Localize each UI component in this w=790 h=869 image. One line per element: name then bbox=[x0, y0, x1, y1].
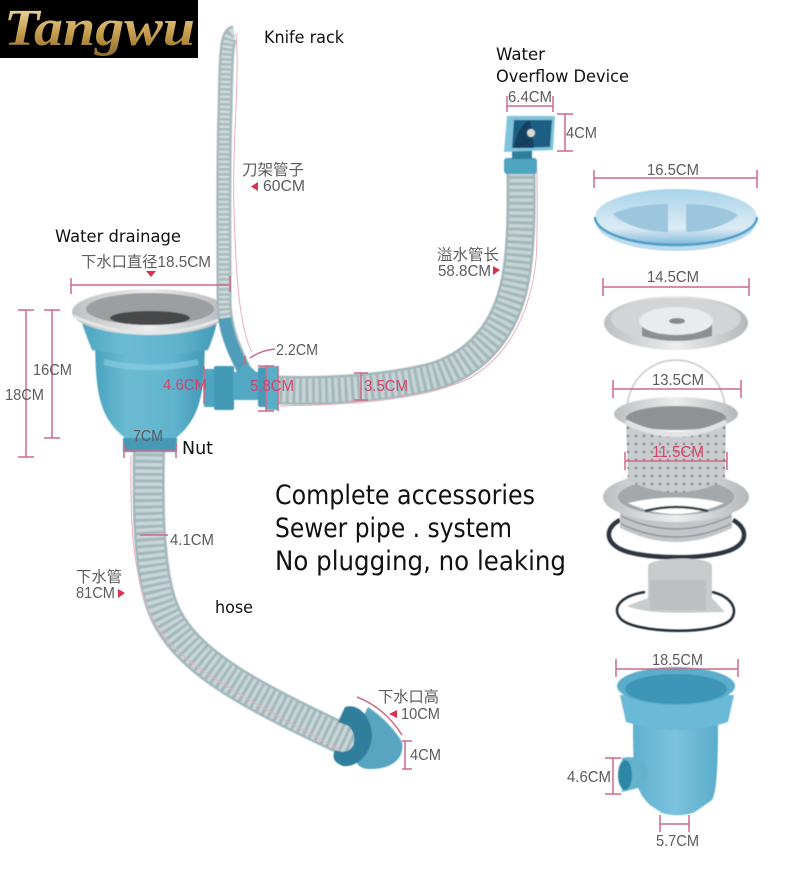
red measures: 11.5CM bbox=[652, 444, 704, 461]
chinese labels and measures: 7CM bbox=[133, 428, 163, 445]
chinese labels and measures: 58.8CM bbox=[438, 263, 491, 280]
pink guide lines bbox=[131, 33, 537, 750]
chinese labels and measures: 溢水管长 bbox=[437, 246, 499, 264]
part: stainless cover bbox=[604, 296, 748, 350]
english labels: Nut bbox=[182, 438, 213, 459]
part: thin o-ring bbox=[617, 592, 734, 631]
chinese labels and measures: 16CM bbox=[33, 362, 72, 379]
chinese labels and measures: 2.2CM bbox=[276, 342, 318, 359]
chinese labels and measures: 4.6CM bbox=[567, 769, 611, 786]
knife rack hose bbox=[224, 33, 243, 368]
red measures: 4.6CM bbox=[163, 377, 207, 394]
english labels: Water bbox=[496, 45, 545, 64]
red measures: 3.5CM bbox=[364, 378, 408, 395]
english labels: Water drainage bbox=[55, 227, 181, 246]
dimension lines bbox=[18, 96, 757, 832]
part: basket bbox=[614, 360, 738, 492]
overflow hose bbox=[276, 172, 521, 390]
main caption bbox=[275, 480, 566, 577]
chinese labels and measures: 4CM bbox=[410, 747, 441, 764]
chinese labels and measures: 下水口直径18.5CM bbox=[81, 253, 211, 271]
english labels bbox=[55, 28, 629, 617]
part: lid bbox=[595, 189, 757, 251]
red markers bbox=[118, 182, 500, 718]
red measures bbox=[163, 377, 704, 461]
chinese labels and measures: 刀架管子 bbox=[242, 161, 304, 179]
chinese labels and measures: 18CM bbox=[5, 387, 44, 404]
chinese labels and measures: 4CM bbox=[566, 125, 597, 142]
english labels: Knife rack bbox=[264, 28, 344, 47]
chinese labels and measures: 4.1CM bbox=[170, 532, 214, 549]
chinese labels and measures: 13.5CM bbox=[652, 372, 704, 389]
chinese labels and measures: 18.5CM bbox=[652, 652, 703, 669]
chinese labels and measures: 81CM bbox=[76, 585, 115, 602]
chinese labels and measures: 5.7CM bbox=[656, 833, 699, 850]
part: grey nut bbox=[627, 558, 725, 613]
main caption: No plugging, no leaking bbox=[275, 546, 566, 577]
chinese labels and measures: 下水口高 bbox=[378, 688, 439, 706]
chinese labels and measures: 下水管 bbox=[76, 568, 122, 586]
overflow device bbox=[504, 116, 555, 174]
part: black o-ring bbox=[609, 520, 744, 557]
chinese labels and measures: 6.4CM bbox=[508, 89, 552, 106]
chinese labels and measures: 16.5CM bbox=[647, 162, 699, 179]
artwork group bbox=[72, 33, 757, 815]
main drain body bbox=[72, 289, 228, 452]
chinese labels and measures: 14.5CM bbox=[647, 269, 699, 286]
hose end connector bbox=[334, 706, 402, 769]
red measures: 5.8CM bbox=[250, 378, 294, 395]
main caption: Complete accessories bbox=[275, 480, 535, 511]
part: threaded ring bbox=[603, 472, 749, 542]
english labels: hose bbox=[215, 598, 253, 617]
chinese labels and measures bbox=[5, 89, 704, 850]
english labels: Overflow Device bbox=[496, 67, 629, 86]
part: blue strainer body bbox=[617, 667, 735, 815]
chinese labels and measures: 60CM bbox=[263, 178, 305, 195]
logo: Tangwu: Tangwu bbox=[4, 0, 195, 57]
chinese labels and measures: 10CM bbox=[401, 706, 440, 723]
main caption: Sewer pipe . system bbox=[275, 513, 512, 544]
side pipe connector bbox=[204, 362, 278, 410]
lower drain hose bbox=[149, 450, 356, 745]
